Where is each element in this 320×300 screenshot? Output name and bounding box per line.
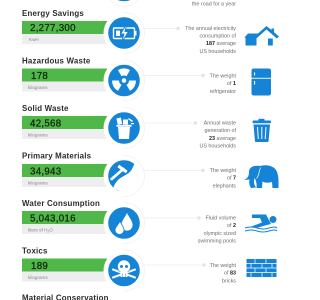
description: swimming pools: Fluid volume bbox=[205, 216, 236, 222]
stat bar: primary materials: 34,943 bbox=[30, 166, 61, 178]
panel: solid waste bbox=[22, 104, 271, 150]
connector line bbox=[143, 263, 206, 267]
connector line bbox=[143, 121, 197, 125]
icon: radiation bbox=[111, 69, 137, 92]
heading: solid waste: Solid Waste bbox=[22, 104, 69, 113]
heading: water consumption: Water Consumption bbox=[22, 199, 100, 208]
stat bar: toxics: 189 bbox=[31, 261, 48, 272]
panel: hazardous waste bbox=[22, 56, 271, 101]
description: weight of elephants: The weight bbox=[210, 168, 236, 174]
description: weight of bricks: bricks bbox=[222, 278, 236, 284]
heading: hazardous waste: Hazardous Waste bbox=[22, 56, 91, 66]
panel: energy savings bbox=[22, 9, 279, 55]
stat bar: hazardous waste: kilograms bbox=[28, 85, 48, 90]
top section remnant: description: the road for a year bbox=[192, 2, 236, 8]
stat bar: energy savings: KwH bbox=[29, 37, 39, 42]
description: electricity: US households bbox=[199, 49, 236, 55]
panel: water consumption bbox=[22, 199, 277, 244]
description: annual waste: generation of bbox=[205, 128, 236, 134]
icon: full bin bbox=[116, 118, 134, 139]
description: weight of refrigerator: of 1 bbox=[227, 81, 236, 87]
top section remnant: circle bbox=[104, 0, 144, 6]
heading: toxics: Toxics bbox=[22, 246, 48, 256]
description: weight of bricks: of 83 bbox=[224, 270, 236, 276]
description: swimming pools: of 2 bbox=[227, 223, 236, 229]
description: annual waste: 23 average bbox=[209, 136, 236, 142]
description: weight of bricks: The weight bbox=[210, 263, 236, 269]
stat bar: hazardous waste bbox=[22, 60, 144, 101]
stat bar: toxics bbox=[22, 250, 144, 291]
description: electricity: 187 average bbox=[206, 41, 236, 47]
description: weight of refrigerator: refrigerator bbox=[210, 89, 236, 95]
stat bar: energy savings: 2,277,300 bbox=[30, 23, 76, 34]
icon: skull and crossbones bbox=[113, 260, 135, 278]
stat bar: solid waste: kilograms bbox=[28, 132, 48, 138]
icon: axe chopping bbox=[112, 162, 143, 195]
icon: brick wall bbox=[246, 259, 276, 277]
heading: primary materials: Primary Materials bbox=[22, 152, 92, 160]
description: annual waste: Annual waste bbox=[204, 120, 236, 126]
icon: refrigerator bbox=[252, 68, 271, 96]
stat bar: primary materials: kilograms bbox=[28, 180, 48, 186]
description: weight of elephants: of 7 bbox=[227, 176, 236, 182]
connector line bbox=[143, 27, 180, 30]
stat bar: solid waste bbox=[22, 108, 144, 148]
stat bar: primary materials bbox=[22, 156, 144, 196]
stat bar: water consumption: liters of H bbox=[28, 228, 47, 232]
description: electricity: The annual electricity bbox=[185, 26, 236, 32]
stat bar: water consumption: 5,043,016 bbox=[30, 214, 76, 224]
icon: trash can bbox=[252, 119, 271, 142]
icon: elephant bbox=[244, 165, 279, 188]
icon: house bbox=[244, 26, 279, 46]
stat bar: hazardous waste: 178 bbox=[31, 71, 48, 82]
description: swimming pools: swimming pools bbox=[198, 238, 236, 244]
connector line bbox=[143, 74, 205, 77]
heading: energy savings: Energy Savings bbox=[22, 9, 84, 18]
connector line bbox=[143, 169, 205, 172]
description: electricity: consumption of bbox=[199, 34, 236, 40]
connector line bbox=[143, 216, 201, 220]
description: swimming pools: olympic sized bbox=[204, 231, 236, 237]
panel: primary materials bbox=[22, 152, 279, 196]
icon: water drops bbox=[115, 212, 133, 234]
icon: swimmer bbox=[245, 214, 277, 232]
panel: toxics bbox=[22, 246, 276, 291]
stat bar: water consumption: 2 bbox=[47, 230, 49, 234]
icon: battery with bolt bbox=[114, 24, 136, 42]
description: annual waste: US households bbox=[199, 144, 236, 150]
stat bar: energy savings bbox=[22, 12, 144, 54]
stat bar: toxics: kilograms bbox=[28, 275, 48, 280]
stat bar: water consumption: O bbox=[49, 228, 53, 232]
stat bar: solid waste: 42,568 bbox=[30, 118, 61, 130]
description: weight of elephants: elephants bbox=[213, 183, 236, 189]
stat bar: water consumption bbox=[22, 202, 144, 244]
description: weight of refrigerator: The weight bbox=[210, 74, 236, 80]
